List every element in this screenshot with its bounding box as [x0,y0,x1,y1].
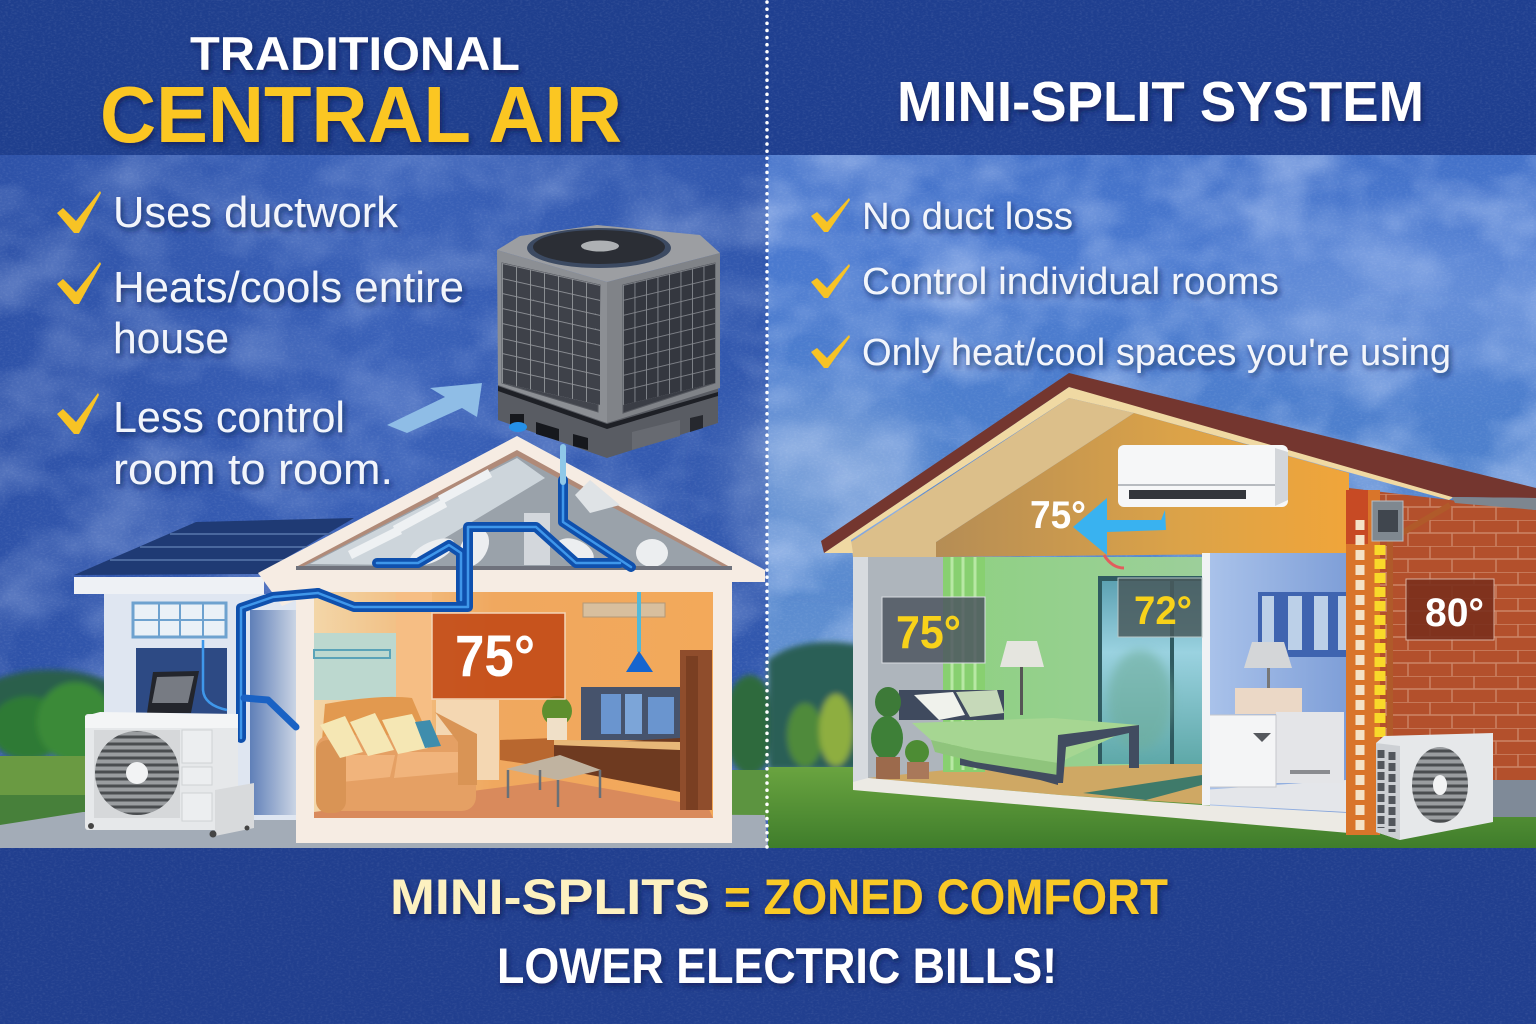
bullet: less control room to room: room to room. [113,445,393,494]
tv window [581,687,680,740]
garage door [250,610,298,815]
outdoor condenser: left [85,712,254,838]
left house [74,436,765,843]
green room [946,557,1202,782]
coffee table [506,755,601,807]
outdoor condenser: right [1376,733,1493,840]
back panel [1235,688,1302,714]
curtain [943,557,985,772]
duct inlet [509,422,527,432]
wall divider [1202,553,1210,805]
bullet: no duct loss: No duct loss [862,196,1073,238]
side fascia [74,577,264,594]
right bullet list [811,196,1451,374]
attic [258,436,765,843]
72 degree room label: 72° [1134,589,1192,633]
side window [133,603,226,637]
appliance right [1276,712,1344,783]
downspout [1390,505,1450,738]
footer texture [0,848,1536,1024]
AC left grille [502,263,600,412]
electrical box [1372,501,1403,541]
bullet: heats/cools entire house: house [113,314,229,363]
background: left mottling [0,155,768,848]
bullet: uses ductwork: Uses ductwork [113,188,399,237]
insulated wall section [1346,490,1380,835]
AC fan [527,228,671,268]
side wall [104,594,298,820]
side roof [74,518,354,575]
beige underside [851,398,1134,557]
blue room lamp [1244,642,1292,690]
bullet: less control room to room: Less control [113,393,345,442]
cyan airflow arrow [1073,498,1166,555]
dark opening with screen [136,640,227,714]
plant [542,696,572,740]
right house [821,373,1536,840]
left bullet list [57,188,464,494]
gable wall [936,413,1349,557]
80 degree outdoor label: 80° [1425,591,1484,635]
roof soffit [824,387,1460,553]
bullet: only heat/cool spaces: Only heat/cool spaces you're using [862,332,1451,374]
sliding door [1098,576,1202,764]
wall vent [583,603,665,617]
sofa [316,697,477,813]
75 degree label: 75° [455,624,535,689]
floor slab [853,778,1349,833]
header band: right [768,0,1536,155]
blue room [1202,553,1346,813]
left title [100,27,622,159]
footer headline: MINI-SPLITS [390,869,710,925]
footer headline [390,869,1168,925]
left gray room [853,557,946,782]
desk [500,738,680,792]
background: right clouds [740,155,1536,848]
left title: CENTRAL AIR [100,70,622,159]
bullet: heats/cools entire house: Heats/cools entire [113,263,464,312]
small refrigerant loop [1104,555,1124,568]
blue room window [1258,592,1346,657]
footer subline: LOWER ELECTRIC BILLS! [497,938,1057,994]
80 degree outdoor label [1406,579,1494,640]
potted plants [871,687,929,779]
right landscape: trees and grass [768,642,1536,848]
mini-split 75 label: 75° [1030,494,1086,537]
bullet: less control room to room [57,393,393,494]
green floor [868,763,1202,804]
background: right sky panel [768,0,1536,848]
left title: TRADITIONAL [190,27,520,80]
bullet: control individual rooms: Control individual rooms [862,261,1279,303]
appliance left [1207,715,1276,787]
tall brown door [680,650,712,810]
header band: left [0,0,768,155]
wall mounted mini-split [1118,445,1288,507]
72 degree room label [1118,578,1202,637]
bullet: heats/cools entire house [57,262,464,363]
blue diffuser [626,592,653,672]
rooftop AC unit [497,225,720,458]
ductwork [241,447,631,738]
foundation [1493,780,1536,817]
background: left panel [0,0,768,848]
75 degree label [432,613,565,699]
brick wall [1349,488,1536,815]
right title: MINI-SPLIT SYSTEM [897,70,1424,134]
AC base [498,382,718,458]
arrow to AC unit [387,383,482,433]
75 degree room label [882,597,985,663]
rug [1083,775,1202,800]
bottom band [0,848,1536,1024]
gutter [1452,497,1536,510]
left landscape: trees and grass [0,670,776,848]
AC right grille [623,263,715,413]
dotted divider [765,2,769,848]
room interior [314,592,713,818]
lamp [1000,641,1044,715]
AC body [497,250,607,423]
bed [899,690,1139,785]
roof [821,373,1536,553]
75 degree room label: 75° [896,606,961,658]
footer headline: = ZONED COMFORT [724,869,1168,925]
AC top [497,225,720,282]
